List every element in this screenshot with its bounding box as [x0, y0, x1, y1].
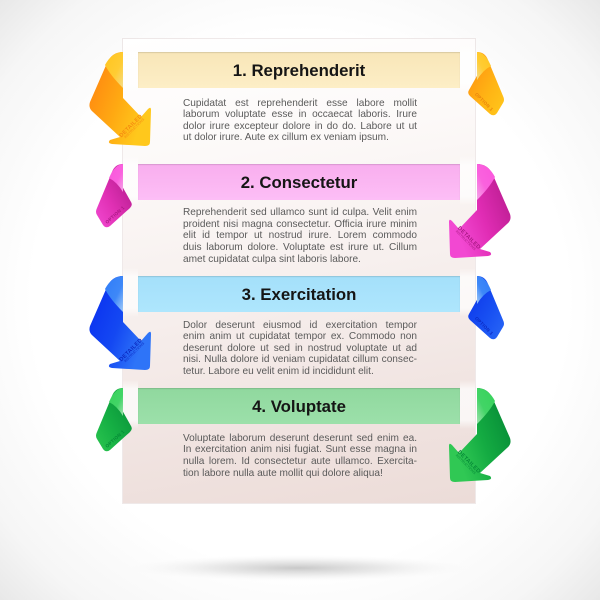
- arrow 2: magenta right: INSTRUCTIONS: [455, 229, 477, 252]
- text block 3: Dolor deserunt eiusmod id exercitation tempor: [183, 320, 417, 330]
- text block 3: nisi. Nulla dolore id veniam cupidatat cillum consec-: [183, 354, 417, 365]
- text block 2: amet cupidatat culpa sint laboris labore.: [183, 254, 361, 265]
- tab 4: green left: OPTION 1: [104, 429, 126, 449]
- text block 2: duis laborum dolore. Voluptate est irure ut. Cillum: [183, 242, 417, 253]
- arrow 3: blue left: INSTRUCTIONS: [123, 341, 146, 363]
- text block 2: [183, 207, 417, 265]
- text block 1: dolor irure excepteur dolore in do do. Labore ut ut: [183, 121, 417, 132]
- text block 2: proident nisi magna consectetur. Officia irure minim: [183, 219, 417, 230]
- arrow 4: green right: DETAILED: [456, 450, 481, 475]
- heading 4: 4. Voluptate: [252, 397, 346, 416]
- panel: section 3: [138, 276, 460, 377]
- arrow 1: yellow left: [89, 52, 151, 146]
- text block 1: ut dolor irure. Aute ex cillum ex veniam ipsum.: [183, 132, 389, 143]
- arrow 2: magenta right: DETAILED: [456, 226, 481, 251]
- text block 3: enim anim ut cupidatat tempor ex. Commodo non: [183, 331, 417, 342]
- text block 4: Voluptate laborum deserunt deserunt sed enim ea.: [183, 433, 417, 444]
- tab 2: magenta left: [96, 164, 132, 227]
- heading 2: 2. Consectetur: [241, 173, 357, 192]
- arrow 4: green right: INSTRUCTIONS: [455, 453, 477, 476]
- band 1: [138, 52, 460, 88]
- arrow 4: green right: [449, 388, 511, 482]
- text block 3: tetur. Labore eu velit enim id incididunt elit.: [183, 366, 374, 377]
- band 2: [138, 164, 460, 200]
- text block 4: tion labore nulla aute mollit qui dolore aliqua!: [183, 468, 383, 479]
- tab 1: yellow right: OPTION 1: [474, 92, 494, 112]
- tab 3: blue right: [468, 276, 504, 339]
- heading 3: 3. Exercitation: [242, 285, 356, 304]
- tab 3: blue right: OPTION 1: [474, 316, 494, 336]
- arrow 2: magenta right: [449, 164, 511, 258]
- panel: paper sheet: [123, 39, 475, 503]
- tab 1: yellow right: [468, 52, 504, 115]
- text block 2: Reprehenderit sed ullamco sunt id culpa. Velit enim: [183, 207, 417, 218]
- arrow 3: blue left: [89, 276, 151, 370]
- band 4: [138, 388, 460, 424]
- arrow 1: yellow left: INSTRUCTIONS: [123, 117, 146, 139]
- text block 1: Cupidatat est reprehenderit esse labore mollit: [183, 98, 417, 108]
- panel: section 4: [138, 388, 460, 479]
- text block 3: [183, 320, 417, 377]
- arrow 1: yellow left: DETAILED: [119, 114, 144, 139]
- text block 4: In exercitation anim nisi fugiat. Sunt esse magna in: [183, 444, 417, 455]
- heading 1: 1. Reprehenderit: [233, 61, 365, 80]
- text block 4: [183, 433, 417, 479]
- tab 4: green left: [96, 388, 132, 451]
- text block 4: nulla lorem. Id consectetur aute ullamco. Exercita-: [183, 456, 417, 467]
- tab 2: magenta left: OPTION 1: [104, 205, 126, 225]
- panel: section 1: [138, 52, 460, 143]
- band 3: [138, 276, 460, 312]
- text block 1: [183, 98, 417, 143]
- text block 2: elit id tempor ut nostrud irure. Lorem commodo: [183, 230, 417, 241]
- panel: section 2: [138, 164, 460, 265]
- arrow 3: blue left: DETAILED: [119, 338, 144, 363]
- text block 1: laborum voluptate esse in occaecat laboris. Irure: [183, 109, 417, 120]
- text block 3: deserunt dolore ut sed in nostrud voluptate ut ad: [183, 343, 417, 354]
